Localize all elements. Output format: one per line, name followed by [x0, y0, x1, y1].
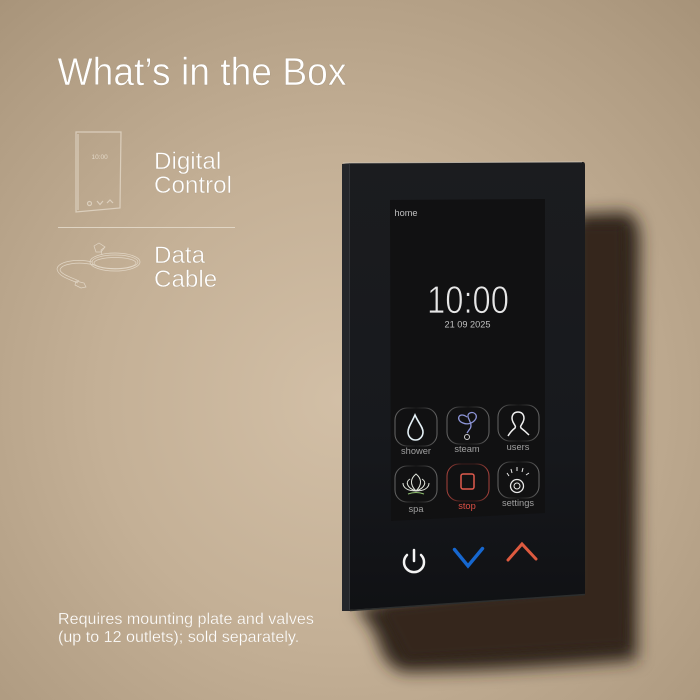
- button: steam: steam: [454, 444, 480, 454]
- label: data cable: Data: [154, 242, 206, 269]
- device shadow: [354, 212, 640, 672]
- footnote: (up to 12 outlets); sold separately.: [58, 628, 299, 646]
- clock: 10:00: [427, 279, 509, 322]
- button: users: [498, 405, 539, 452]
- title: What’s in the Box: [58, 51, 347, 94]
- physical button: up arrow: [508, 544, 536, 560]
- screen panel: [390, 199, 545, 521]
- button: settings: [498, 462, 539, 508]
- physical button: down arrow: [454, 548, 482, 566]
- device side edge: [342, 163, 350, 611]
- divider: [58, 227, 235, 228]
- label: digital control: Control: [154, 172, 232, 199]
- button: users: users: [507, 442, 530, 452]
- top highlight: [343, 162, 582, 163]
- screen label: home: home: [394, 208, 417, 218]
- digital control device: [342, 162, 585, 611]
- button: shower: shower: [401, 446, 431, 456]
- icon: digital control outline: [76, 132, 121, 212]
- icon: data cable: [57, 243, 140, 288]
- button: shower: [395, 408, 437, 456]
- button: stop: stop: [458, 501, 476, 511]
- touchscreen: [390, 199, 545, 521]
- icon: digital control outline: 10:00: [92, 154, 108, 161]
- label: digital control: Digital: [154, 148, 221, 175]
- button: stop: [447, 464, 489, 511]
- side highlight: [348, 164, 350, 610]
- label: data cable: Cable: [154, 266, 217, 293]
- item: digital control: [76, 132, 232, 212]
- item: data cable: [57, 242, 217, 293]
- bottom edge: [350, 594, 585, 610]
- button: settings: settings: [502, 498, 534, 508]
- button: steam: [447, 407, 489, 454]
- footnote: Requires mounting plate and valves: [58, 610, 314, 628]
- button: spa: [395, 466, 437, 514]
- physical button: power: [404, 550, 424, 572]
- device front face: [349, 162, 585, 610]
- date: 21 09 2025: [445, 320, 490, 330]
- button: spa: spa: [408, 504, 424, 514]
